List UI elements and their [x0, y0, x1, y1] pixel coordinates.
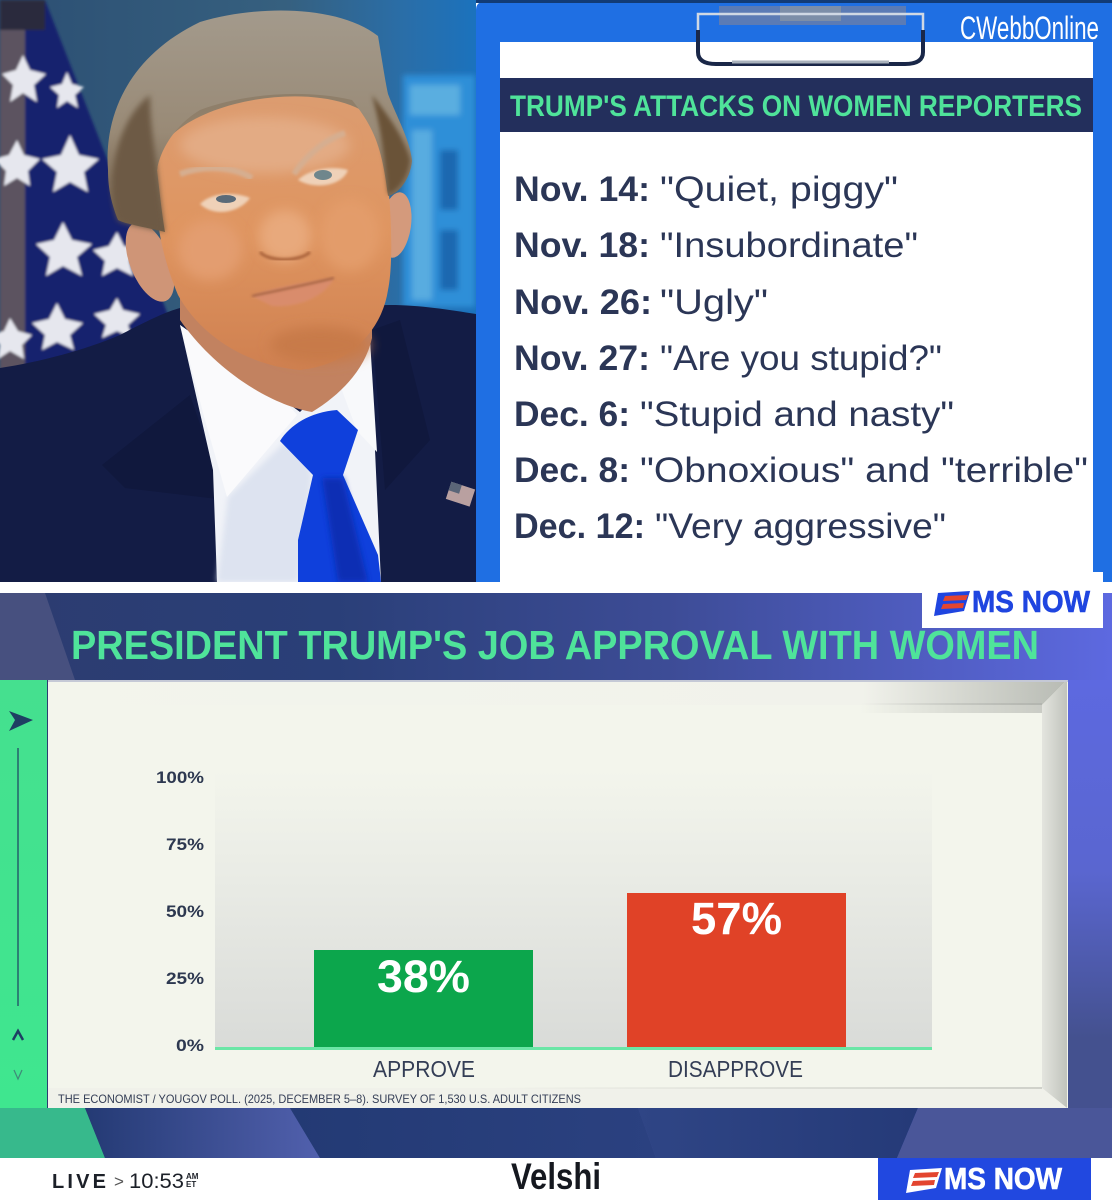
background sign: [403, 75, 475, 307]
list of attacks: Nov. 18:: [514, 226, 650, 265]
skull behind hairline: [173, 94, 359, 134]
panel: clipboard list: [476, 0, 1112, 593]
photo: portrait of Donald Trump at podium: [0, 0, 476, 582]
logo: MS NOW footer: MS NOW: [944, 1161, 1063, 1196]
list of attacks: "Very aggressive": [655, 507, 946, 546]
list of attacks: Dec. 12:: [514, 507, 645, 546]
list of attacks: "Ugly": [660, 283, 768, 322]
live clock: [52, 1170, 199, 1193]
y axis labels: 25%: [166, 969, 204, 988]
logo: MS NOW top: [922, 572, 1103, 628]
label: approve: APPROVE: [373, 1056, 475, 1082]
panel: side navigation: [0, 680, 47, 1108]
baseline: [215, 1047, 932, 1050]
live clock: >: [114, 1172, 124, 1191]
list of attacks: Nov. 14:: [514, 170, 650, 209]
list of attacks: "Are you stupid?": [660, 339, 942, 378]
heading bar: [500, 78, 1093, 132]
value: 38%: 38%: [377, 951, 470, 1002]
y axis labels: 0%: [176, 1036, 204, 1055]
list of attacks: "Stupid and nasty": [640, 395, 954, 434]
suit: [0, 305, 476, 582]
tie: [280, 410, 381, 582]
panel: chart stage: [48, 680, 1068, 1108]
lapel pin: [446, 482, 475, 507]
bar: approve: [314, 950, 533, 1047]
source note: THE ECONOMIST / YOUGOV POLL. (2025, DECEMBER 5–8). SURVEY OF 1,530 U.S. ADULT CITIZENS: [58, 1092, 581, 1106]
live clock: LIVE: [52, 1171, 106, 1193]
title: job approval: PRESIDENT TRUMP'S JOB APPROVAL WITH WOMEN: [71, 622, 1039, 668]
value: 57%: 57%: [691, 893, 782, 944]
live clock: AM: [186, 1172, 199, 1181]
American flag: [0, 0, 170, 370]
y axis labels: 50%: [166, 902, 204, 921]
list of attacks: "Insubordinate": [660, 226, 918, 265]
ears: [126, 224, 174, 302]
bar chart: approve vs disapprove: [156, 768, 932, 1082]
y axis labels: 100%: [156, 768, 204, 787]
list of attacks: [514, 170, 1088, 546]
list of attacks: Dec. 8:: [514, 451, 630, 490]
face: [156, 96, 391, 370]
footer bar: [0, 1156, 1112, 1200]
logo: MS NOW footer: [878, 1158, 1091, 1200]
list of attacks: Dec. 6:: [514, 395, 630, 434]
logo: MS NOW top: MS NOW: [972, 584, 1091, 619]
shirt: [180, 325, 381, 582]
list of attacks: "Quiet, piggy": [660, 170, 898, 209]
mouth: [256, 280, 332, 306]
live clock: 10:53: [129, 1170, 184, 1193]
y axis labels: 75%: [166, 835, 204, 854]
bar: disapprove: [627, 893, 846, 1047]
show name: Velshi: [511, 1156, 601, 1197]
label: disapprove: DISAPPROVE: [668, 1056, 803, 1082]
list of attacks: Nov. 27:: [514, 339, 650, 378]
panel: broadcast background: [0, 593, 1112, 1158]
live clock: ET: [186, 1180, 196, 1189]
hair: [108, 10, 412, 232]
y axis labels: [156, 768, 204, 1055]
list of attacks: Nov. 26:: [514, 283, 652, 322]
eyes and brows: [180, 133, 348, 260]
neck: [180, 298, 372, 412]
clipboard clip: [698, 6, 923, 64]
list of attacks: "Obnoxious" and "terrible": [640, 451, 1088, 490]
